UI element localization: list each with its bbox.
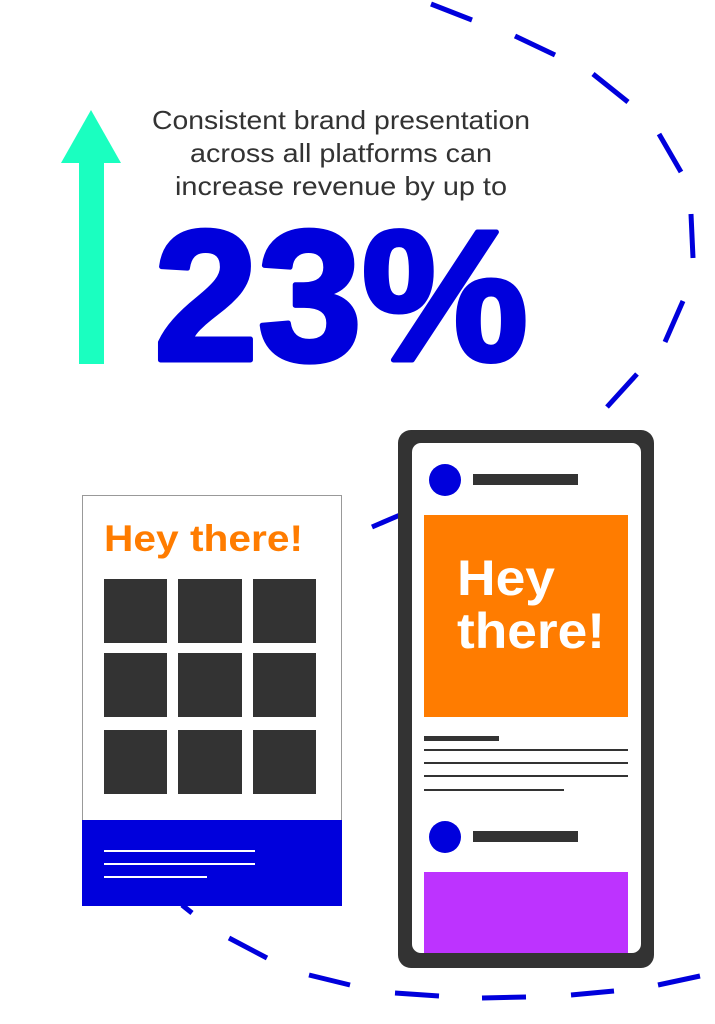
post text lines [424, 736, 628, 791]
post 1 header [429, 464, 461, 496]
text: statement: across all platforms can [190, 138, 492, 168]
text: statement: Consistent brand presentation [152, 105, 530, 135]
orange post [424, 515, 628, 717]
post 2 header [429, 821, 461, 853]
phone: there! [457, 603, 605, 659]
text: statement [152, 105, 530, 201]
poster grid [104, 579, 316, 794]
poster footer [82, 820, 342, 906]
phone [398, 430, 654, 968]
phone: Hey [457, 550, 555, 606]
poster heading: Hey there! [104, 518, 303, 559]
icon: up arrow [61, 110, 121, 364]
purple post [424, 872, 628, 953]
text: statement: increase revenue by up to [175, 171, 507, 201]
big number 23%: 23% [154, 193, 528, 400]
dashed circle path [182, 4, 700, 998]
poster [82, 496, 342, 906]
